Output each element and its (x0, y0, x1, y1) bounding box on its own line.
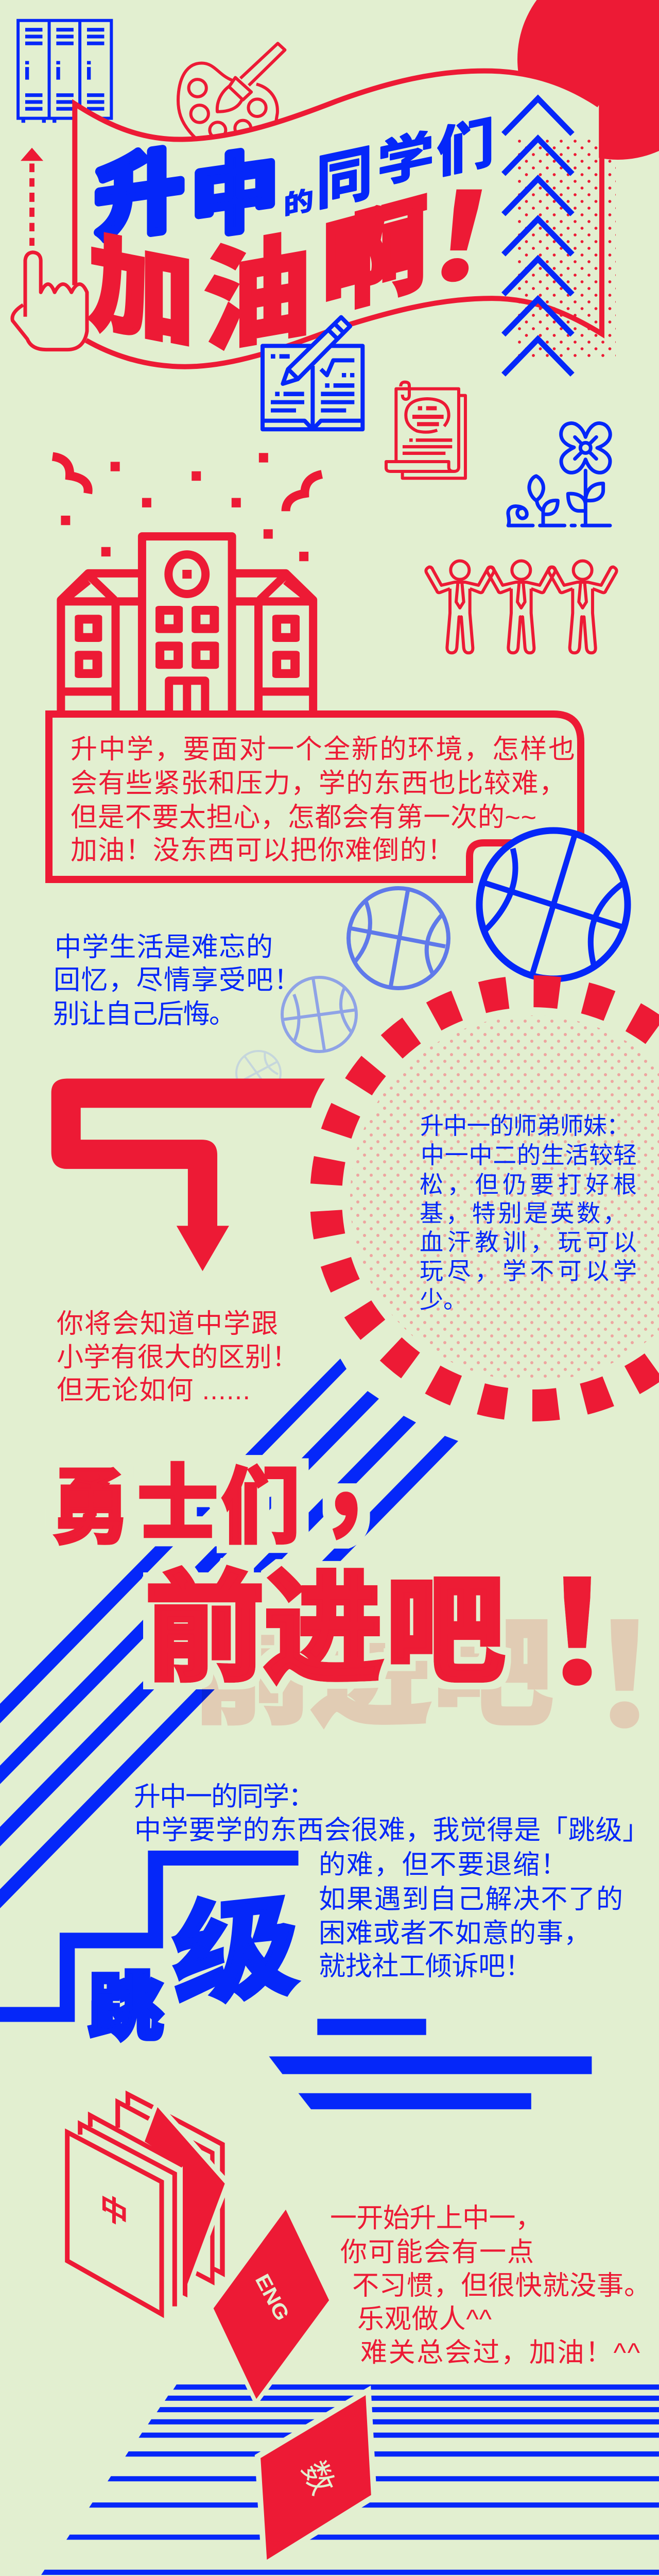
icon: stack of files: 中 (100, 2189, 128, 2235)
text: encouragement: 乐观做人^^ (357, 2304, 492, 2334)
chevrons pointing up (504, 98, 573, 375)
heading: 前进吧！: 进 (264, 1562, 383, 1697)
heading shadow: 前进吧！ (193, 1598, 659, 1756)
text: encouragement: 不习惯，但很快就没事。 (352, 2271, 651, 2301)
heading shadow: 前进吧！: 吧 (433, 1609, 552, 1739)
text: encouragement: 你可能会有一点 (340, 2238, 534, 2267)
dashed red ring (313, 978, 659, 1419)
icon: school building (61, 536, 313, 713)
text: advice to juniors: 血汗教训，玩可以 (420, 1229, 637, 1256)
title: 升中的同学们: 们 (437, 112, 494, 185)
title: 加油啊！ (89, 173, 573, 365)
stepped staircase line (0, 1851, 299, 2022)
text: advice to juniors: 松，但仍要打好根 (420, 1171, 637, 1198)
text: school life memories: 中学生活是难忘的 (55, 933, 273, 962)
text: advice on the jump in difficulty: 的难，但不要退缩！ (319, 1850, 567, 1880)
confetti and curls (53, 453, 322, 561)
text: advice on the jump in difficulty: 中学要学的东西会很难，我觉得是「跳级」 (134, 1816, 649, 1845)
text: intro paragraph: 但是不要太担心，怎都会有第一次的~~ (71, 803, 536, 833)
title: 升中的同学们: 升 (95, 140, 184, 251)
text: advice on the jump in difficulty: 就找社工倾诉吧！ (319, 1952, 532, 1981)
heading: 前进吧！: 吧 (386, 1567, 505, 1696)
heading: 勇士们，: 士 (137, 1458, 218, 1550)
title: 升中的同学们 (95, 112, 494, 251)
icon: document with scroll (386, 382, 465, 478)
red dot pattern (515, 139, 616, 358)
blue bars (269, 2019, 592, 2109)
text: difference from primary school: 小学有很大的区别！ (57, 1343, 299, 1372)
text: encouragement: 一开始升上中一， (330, 2204, 542, 2233)
text: advice to juniors: 玩尽，学不可以学 (420, 1258, 637, 1284)
banner ribbon (75, 71, 602, 367)
title: 加油啊！: 啊 (322, 185, 427, 329)
icon: flower and sprouts (508, 423, 610, 526)
text: advice to juniors: 升中一的师弟师妹： (420, 1112, 630, 1139)
title: 加油啊！: 加 (89, 225, 195, 361)
heading shadow: 前进吧！: 前 (193, 1605, 311, 1737)
mask behind second heading (143, 1572, 500, 1689)
card: ENG (214, 2210, 329, 2399)
icon: pointing hand (12, 252, 87, 350)
icon: paint palette and brush (178, 43, 285, 138)
text: school life memories: 别让自己后悔。 (53, 999, 236, 1029)
heading: 勇士们， (51, 1411, 420, 1554)
text: school life memories: 回忆，尽情享受吧！ (54, 965, 301, 995)
text: difference from primary school: 你将会知道中学跟 (57, 1309, 278, 1339)
icon: small basketball (282, 977, 356, 1052)
text: advice on the jump in difficulty: 困难或者不如意的事， (319, 1919, 591, 1948)
icon: medium basketball (349, 888, 448, 988)
icon: lockers (18, 21, 111, 123)
text: intro paragraph: 加油！没东西可以把你难倒的！ (71, 836, 454, 866)
text: advice to juniors: 中一中二的生活较轻 (421, 1142, 637, 1168)
card: 数: 数 (295, 2456, 341, 2500)
horizontal blue stripes (41, 2384, 659, 2575)
heading: 跳级: 跳 (88, 1967, 163, 2049)
text: encouragement: 难关总会过，加油！^^ (360, 2338, 640, 2368)
text: school life memories (53, 933, 301, 1029)
heading: 跳级 (88, 1883, 299, 2049)
icon: faded basketball (236, 1051, 281, 1095)
panel: intro speech box (49, 714, 581, 879)
text: intro paragraph (71, 735, 575, 866)
icon: open book with pencil (263, 317, 362, 429)
dotted circle (350, 1015, 659, 1381)
heading: 勇士们，: 们 (221, 1462, 300, 1554)
text: difference from primary school: 但无论如何 ...... (57, 1376, 250, 1405)
title: 升中的同学们: 同 (316, 140, 373, 218)
title: 加油啊！: ！ (415, 173, 573, 305)
diagonal blue stripes (0, 1359, 458, 1908)
heading: 跳级: 级 (173, 1883, 299, 2020)
text: advice to juniors: 少。 (420, 1286, 467, 1313)
heading: 前进吧！: 前 (146, 1562, 264, 1694)
text: intro paragraph: 会有些紧张和压力，学的东西也比较难， (71, 769, 566, 799)
heading: 勇士们，: ， (317, 1411, 420, 1549)
dashed arrow pointing up (21, 148, 43, 246)
text: intro paragraph: 升中学，要面对一个全新的环境，怎样也 (71, 735, 575, 765)
text: advice on the jump in difficulty: 升中一的同学： (134, 1782, 315, 1812)
icon: three people holding hands (426, 561, 617, 653)
text: advice on the jump in difficulty (134, 1782, 649, 1981)
arrow: red bent arrow (51, 1079, 325, 1271)
title: 加油啊！: 油 (204, 223, 310, 365)
icon: stack of files (67, 2094, 225, 2314)
text: advice on the jump in difficulty: 如果遇到自己解决不了的 (319, 1885, 623, 1914)
heading: 勇士们，: 勇 (51, 1462, 130, 1554)
text: advice to juniors (420, 1112, 637, 1313)
heading shadow: 前进吧！: 进 (311, 1604, 430, 1739)
red sun circle (517, 0, 659, 160)
heading: 前进吧！ (146, 1555, 659, 1714)
text: advice to juniors: 基，特别是英数， (420, 1200, 627, 1227)
title: 升中的同学们: 学 (377, 126, 434, 194)
card: 数 (261, 2395, 371, 2560)
icon: large basketball (479, 831, 628, 979)
text: encouragement (330, 2204, 651, 2368)
title: 升中的同学们: 中 (192, 143, 278, 248)
card: ENG: ENG (251, 2270, 294, 2324)
title: 升中的同学们: 的 (284, 185, 314, 221)
text: difference from primary school (57, 1309, 299, 1405)
